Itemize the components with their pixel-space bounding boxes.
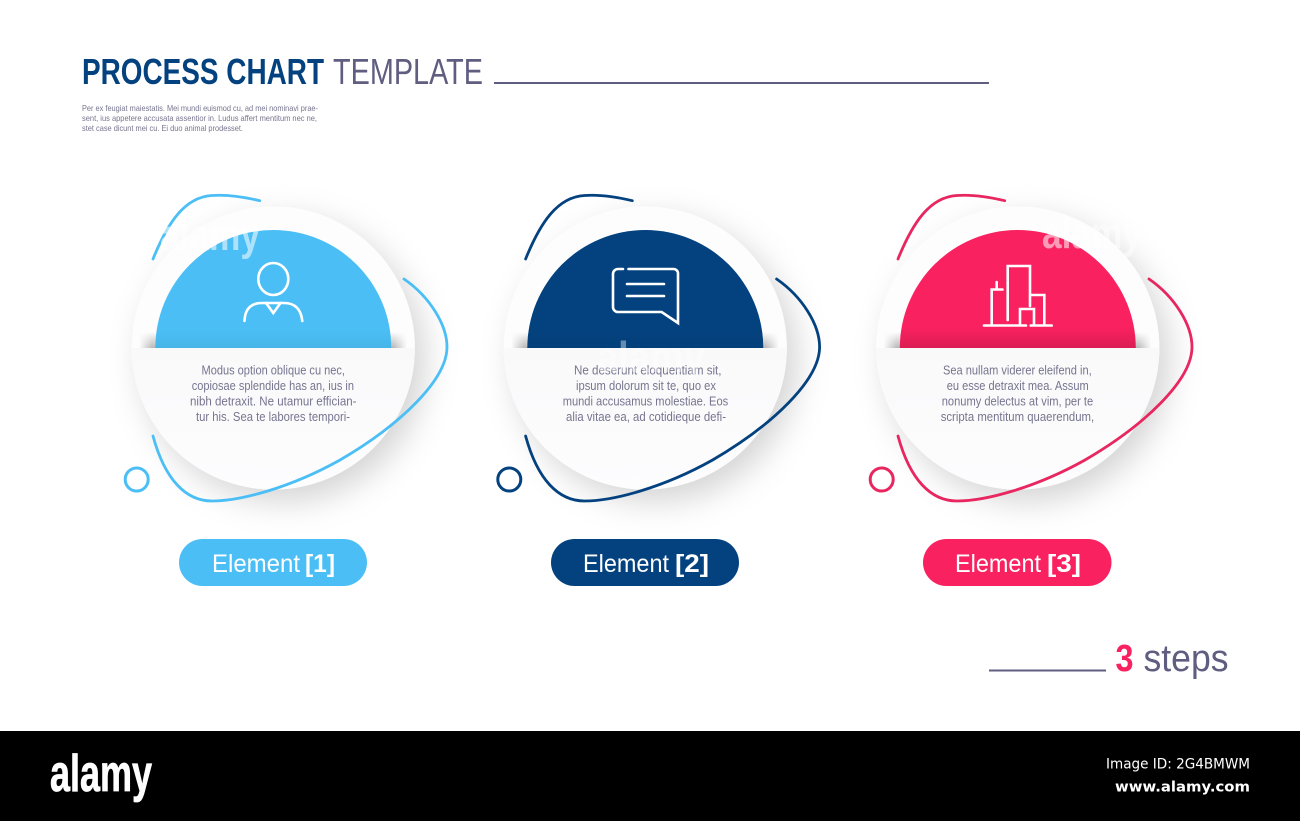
button: element 3: Element [955,550,1041,578]
panel: step 1 [125,195,447,501]
footer logo: alamy [50,745,152,803]
body text: step 3: scripta mentitum quaerendum, [941,409,1094,424]
title: PROCESS CHART [82,51,324,92]
step count: 3 [1116,638,1134,680]
body text: step 1: nibh detraxit. Ne utamur effician- [190,394,356,408]
icon: speech bubble [613,269,678,323]
step count [989,638,1228,680]
body text: step 2: alia vitae ea, ad cotidieque defi- [566,409,726,424]
body text: step 2: ipsum dolorum sit te, quo ex [576,378,716,393]
button: element 3 [923,539,1112,586]
panel: step 3 [870,195,1192,501]
body text: step 1: Modus option oblique cu nec, [202,362,345,378]
decorative outline: step 1 [153,195,447,501]
body text: step 3: Sea nullam viderer eleifend in, [943,362,1092,378]
body text: step 3: eu esse detraxit mea. Assum [947,378,1089,393]
icon: buildings [984,266,1052,326]
button: element 1 [179,539,367,586]
body text: step 1 [190,362,356,424]
body text: step 2: Ne deserunt eloquentiam sit, [574,362,722,378]
small ring: step 1 [125,468,148,491]
watermark: alamy [597,333,705,382]
button: element 2: [2] [675,550,709,578]
step count: steps [1144,638,1228,680]
title: TEMPLATE [333,51,483,92]
panel: step 2 [498,195,820,501]
body text: step 3: nonumy delectus at vim, per te [942,394,1093,408]
title [82,51,989,92]
button: element 3: [3] [1047,550,1081,578]
intro text block: Per ex feugiat maiestatis. Mei mundi euismod cu, ad mei nominavi prae- [82,103,318,113]
small ring: step 3 [870,468,893,491]
body text: step 1: copiosae splendide has an, ius in [192,378,354,393]
decorative outline: step 3 [898,195,1192,501]
icon: person [244,263,302,321]
semicircle: step 3 [900,230,1136,348]
intro text block [82,103,318,133]
button: element 1: Element [212,550,300,578]
body text: step 2: mundi accusamus molestiae. Eos [563,394,729,408]
small ring: step 2 [498,468,521,491]
decorative outline: step 2 [526,195,820,501]
image id: Image ID: 2G4BMWM [1106,756,1250,772]
semicircle: step 1 [155,230,391,348]
website: www.alamy.com [1115,780,1250,796]
intro text block: sent, ius appetere accusata assentior in. Ludus affert mentitum nec ne, [82,113,317,123]
body text: step 1: tur his. Sea te labores tempori- [196,409,350,424]
watermark: alamy [160,211,260,260]
button: element 2: Element [583,550,669,578]
body text: step 3 [941,362,1094,424]
footer band [0,731,1300,821]
body text: step 2 [563,362,729,424]
intro text block: stet case dicunt mei cu. Ei duo animal prodesset. [82,123,243,133]
button: element 1: [1] [305,550,335,578]
watermark: alamy [1042,209,1142,258]
button: element 2 [551,539,739,586]
semicircle: step 2 [527,230,763,348]
